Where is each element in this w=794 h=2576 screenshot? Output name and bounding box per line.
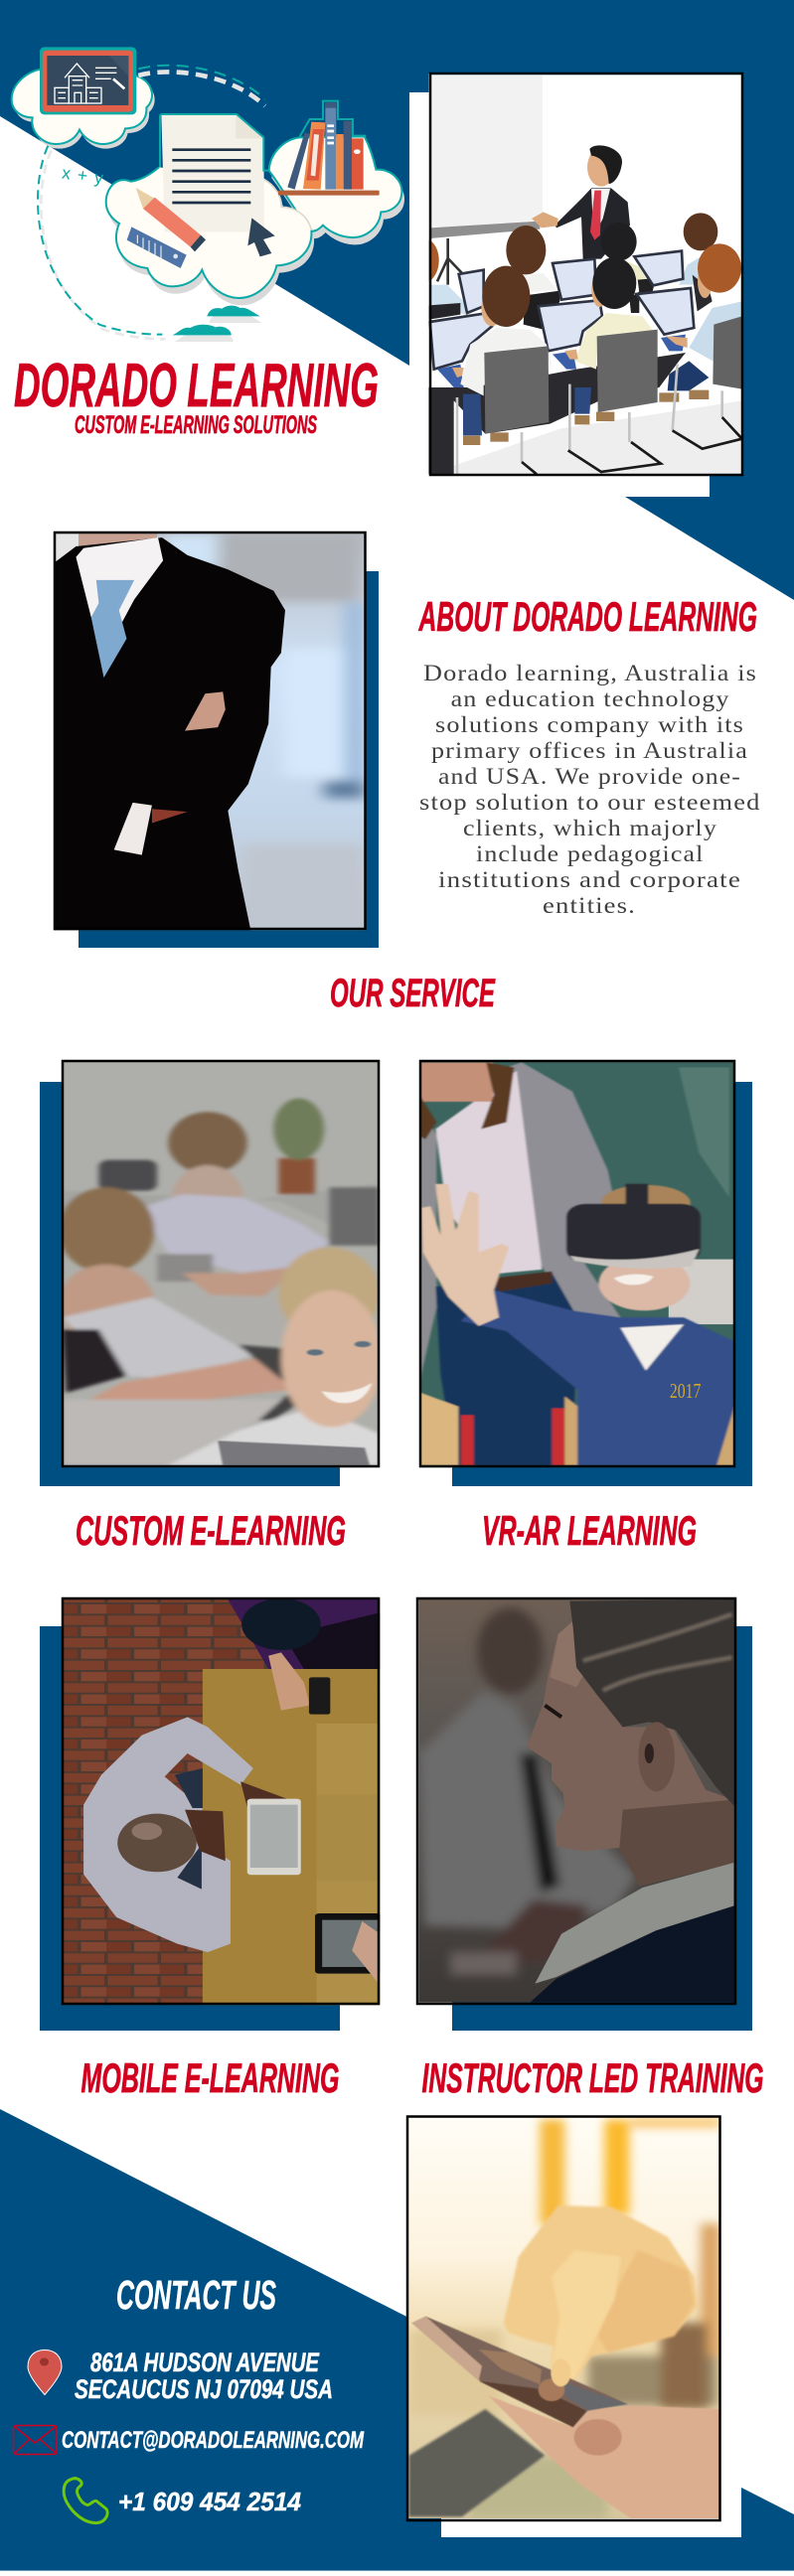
photo frame: businessman [55, 532, 366, 929]
bottom edge line [0, 2570, 794, 2571]
heading: custom e-learning: CUSTOM E-LEARNING [76, 1507, 346, 1554]
pencil [136, 188, 206, 251]
photo: businessman with crossed arms [54, 531, 366, 930]
title: DORADO LEARNING [14, 352, 379, 420]
contact address: SECAUCUS NJ 07094 USA [75, 2374, 333, 2404]
document [160, 114, 269, 231]
back students [429, 213, 717, 330]
about paragraph: primary offices in Australia [431, 738, 748, 763]
icon: phone [64, 2479, 107, 2523]
about paragraph: entities. [543, 893, 636, 918]
photo: woman in profile [418, 1598, 735, 2003]
logo illustration [12, 47, 404, 342]
cloud: document [106, 167, 311, 298]
about paragraph: and USA. We provide one- [438, 764, 741, 789]
dashed arc left [38, 146, 166, 339]
vr-ar backing [452, 1082, 752, 1486]
blackboard [40, 47, 136, 114]
photo: top view of people at table [62, 1597, 381, 2005]
small clouds [172, 306, 262, 342]
keyboards and legs [437, 335, 709, 440]
instructor backing [452, 1626, 752, 2031]
about paragraph: Dorado learning, Australia is [423, 661, 757, 685]
formula: x+y [61, 162, 104, 188]
photo frame: smartphone [407, 2116, 719, 2520]
contact address: 861A HUDSON AVENUE [90, 2348, 320, 2377]
icon: envelope [14, 2426, 57, 2454]
heading: mobile e-learning: MOBILE E-LEARNING [81, 2054, 340, 2101]
photo: boy wearing VR headset [419, 1060, 735, 1467]
heading: contact us: CONTACT US [116, 2272, 276, 2318]
contact phone: +1 609 454 2514 [118, 2487, 301, 2516]
photo: boy wearing VR headset: 2017 [670, 1379, 701, 1403]
about paragraph: clients, which majorly [463, 816, 717, 840]
ruler [127, 227, 187, 268]
cursor [247, 218, 275, 256]
about photo backing [79, 571, 379, 948]
icon: location pin [28, 2350, 62, 2394]
photo frame: woman [417, 1598, 735, 2004]
about paragraph: stop solution to our esteemed [419, 790, 761, 815]
photo frame: classroom [430, 74, 742, 475]
heading: our service: OUR SERVICE [330, 972, 496, 1015]
about paragraph [419, 661, 761, 918]
photo: hand using smartphone [407, 2116, 720, 2518]
about paragraph: an education technology [451, 686, 730, 711]
mobile e-learning backing [40, 1626, 340, 2031]
photo: classroom with teacher [428, 74, 742, 474]
cloud: shelf [269, 136, 401, 237]
desks [428, 353, 686, 474]
about paragraph: solutions company with its [435, 712, 744, 737]
bottom white backing [441, 2285, 741, 2537]
chairs [457, 316, 742, 474]
books and shelf [278, 101, 380, 196]
about paragraph: include pedagogical [476, 841, 704, 866]
photo frame: children [63, 1061, 379, 1466]
about paragraph: institutions and corporate [438, 867, 741, 892]
contact address [75, 2348, 333, 2404]
bottom blue background shape [0, 2109, 794, 2570]
cloud: board [12, 69, 152, 144]
subtitle: CUSTOM E-LEARNING SOLUTIONS [75, 411, 317, 439]
front students [452, 243, 742, 395]
top blue background shape [0, 0, 794, 600]
photo frame: VR [420, 1061, 734, 1466]
dashed arc top [138, 66, 265, 106]
laptops [430, 251, 694, 370]
cloud shadows [14, 74, 404, 305]
custom e-learning backing [40, 1082, 340, 1486]
contact email: CONTACT@DORADOLEARNING.COM [62, 2427, 365, 2454]
photo: children with tablets [59, 1060, 383, 1467]
teacher [532, 145, 630, 259]
photo frame: top view [63, 1598, 379, 2004]
